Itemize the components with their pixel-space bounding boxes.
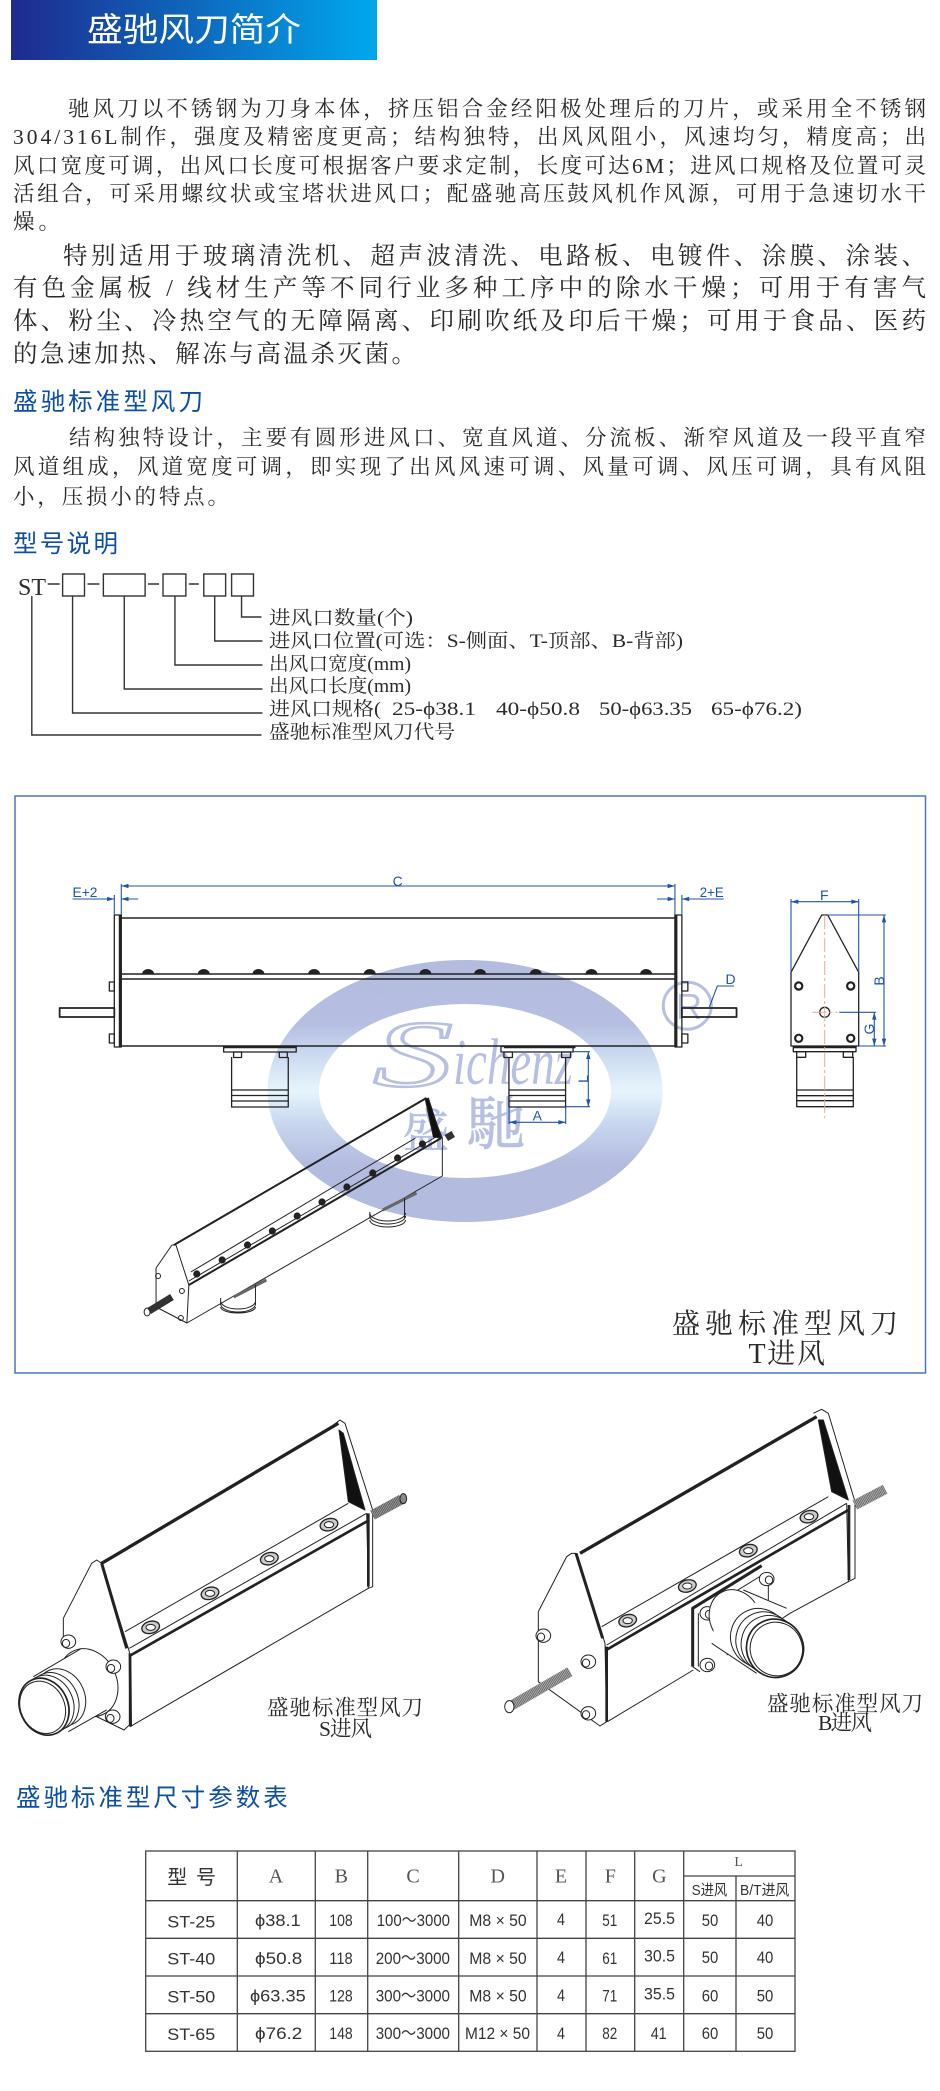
model code diagram: 65-ϕ76.2) <box>711 699 802 720</box>
table header: B/T进风 <box>740 1882 789 1899</box>
watermark logo: 盛 <box>403 1095 449 1161</box>
text block: applications paragraph: 特别适用于玻璃清洗机、超声波清洗、电路板、电镀件、涂膜、涂装、 <box>63 242 926 270</box>
table row ST-25: 40 <box>757 1911 773 1930</box>
dimension lines: front view: C <box>393 873 403 889</box>
isometric drawing: S inlet <box>10 1420 407 1743</box>
table header: A <box>269 1866 284 1888</box>
dimension lines: inlet and side view: D <box>725 971 736 987</box>
table row ST-50: ST-50 <box>167 1987 215 2006</box>
heading: standard air knife: 盛驰标准型风刀 <box>13 388 203 416</box>
model code diagram: 进风口规格( <box>269 698 381 720</box>
front view of air knife <box>60 915 737 1107</box>
text block: intro paragraph: 燥。 <box>13 210 60 234</box>
table row ST-65: 50 <box>757 2024 773 2043</box>
table row ST-50: 128 <box>329 1987 353 2006</box>
table row ST-40: ST-40 <box>167 1950 215 1969</box>
table row ST-25: 100～3000 <box>377 1911 450 1930</box>
table row ST-40: 50 <box>702 1948 718 1967</box>
table row ST-50: ϕ63.35 <box>250 1987 306 2006</box>
table header: 型 号 <box>167 1866 216 1889</box>
table row ST-65: ST-65 <box>167 2025 215 2044</box>
caption: B inlet: 盛驰标准型风刀 <box>767 1692 923 1716</box>
text block: intro paragraph: 活组合，可采用螺纹状或宝塔状进风口；配盛驰高压鼓风机作风源，可用于急速切水干 <box>13 182 926 207</box>
dimension lines: inlet and side view: A <box>533 1108 543 1124</box>
text block: intro paragraph: 风口宽度可调，出风口长度可根据客户要求定制，长度可达6M；进风口规格及位置可灵 <box>13 154 926 179</box>
caption: S inlet: 盛驰标准型风刀 <box>267 1696 423 1720</box>
table row ST-25: 108 <box>329 1911 353 1930</box>
table row ST-50: 50 <box>757 1987 773 2006</box>
header banner: 盛驰风刀简介 <box>87 11 301 48</box>
dimension lines: inlet and side view: L <box>575 1075 591 1083</box>
table row ST-50: 300～3000 <box>376 1987 450 2006</box>
table row ST-40 <box>167 1947 773 1969</box>
table row ST-50 <box>167 1984 773 2006</box>
text block: intro paragraph: 驰风刀以不锈钢为刀身本体，挤压铝合金经阳极处理后的刀片，或采用全不锈钢 <box>68 97 926 122</box>
table row ST-40: 4 <box>557 1948 565 1967</box>
table row ST-40: 200～3000 <box>376 1949 450 1968</box>
table row ST-25: 25.5 <box>644 1909 675 1928</box>
panel: T inlet drawing <box>15 796 926 1373</box>
table row ST-65 <box>167 2024 773 2044</box>
dimension lines: inlet and side view: G <box>861 1024 877 1034</box>
text block: applications paragraph: 体、粉尘、冷热空气的无障隔离、印刷吹纸及印后干燥；可用于食品、医药 <box>13 307 926 335</box>
dimension lines: inlet and side view <box>509 887 887 1124</box>
dimension lines: inlet and side view: B <box>871 976 887 986</box>
table row ST-40: 61 <box>602 1949 617 1968</box>
dimension lines: inlet and side view: F <box>820 887 829 903</box>
model code diagram: 出风口长度(mm) <box>269 675 411 697</box>
caption: T inlet: 盛驰标准型风刀 <box>672 1308 898 1340</box>
model code diagram: 盛驰标准型风刀代号 <box>269 721 455 743</box>
text block: applications paragraph: 的急速加热、解冻与高温杀灭菌。 <box>13 340 416 368</box>
table row ST-65: ϕ76.2 <box>255 2024 302 2043</box>
table row ST-65: 60 <box>702 2024 718 2043</box>
table header: B <box>335 1866 348 1888</box>
table row ST-50: 60 <box>702 1987 718 2006</box>
table row ST-65: 4 <box>557 2024 565 2043</box>
table row ST-25: ϕ38.1 <box>255 1911 301 1930</box>
table header <box>167 1855 789 1899</box>
table row ST-50: 4 <box>557 1986 565 2005</box>
table row ST-25: ST-25 <box>167 1912 215 1931</box>
isometric drawing: B inlet <box>505 1409 885 1726</box>
side view of air knife <box>791 915 859 1118</box>
heading: dimension table: 盛驰标准型尺寸参数表 <box>16 1784 288 1812</box>
model code diagram: 50-ϕ63.35 <box>599 699 692 720</box>
text block: applications paragraph <box>13 242 926 368</box>
watermark logo: S <box>373 1001 453 1107</box>
table header: D <box>490 1866 505 1888</box>
table row ST-65: M12 × 50 <box>465 2024 530 2043</box>
table row ST-40: 40 <box>757 1948 773 1967</box>
caption: S inlet: S进风 <box>319 1717 372 1741</box>
isometric air knife <box>144 1098 453 1323</box>
caption: B inlet <box>767 1692 923 1735</box>
table row ST-40: M8 × 50 <box>469 1949 527 1968</box>
table row ST-25 <box>167 1909 773 1931</box>
text block: structure paragraph: 小，压损小的特点。 <box>13 485 229 510</box>
dimension lines: front view: E+2 <box>73 884 98 900</box>
header banner <box>11 0 377 60</box>
table row ST-50: 71 <box>602 1987 617 2006</box>
table row ST-25: M8 × 50 <box>469 1911 527 1930</box>
text block: intro paragraph: 304/316L制作，强度及精密度更高；结构独特，出风风阻小，风速均匀，精度高；出 <box>13 125 926 150</box>
model code diagram: 进风口数量(个) <box>269 607 413 629</box>
text block: applications paragraph: 有色金属板 / 线材生产等不同行业多种工序中的除水干燥；可用于有害气 <box>13 274 926 302</box>
heading: model description: 型号说明 <box>13 530 118 558</box>
model code diagram: 40-ϕ50.8 <box>496 699 580 720</box>
table row ST-40: ϕ50.8 <box>255 1949 302 1968</box>
model code diagram <box>18 574 802 743</box>
watermark logo: ichenz <box>453 1026 573 1099</box>
dimension lines: front view: 2+E <box>700 884 724 900</box>
table row ST-40: 30.5 <box>644 1947 675 1966</box>
table row ST-50: 35.5 <box>644 1984 675 2003</box>
caption: B inlet: B进风 <box>818 1711 872 1735</box>
caption: T inlet: T进风 <box>748 1338 825 1370</box>
model code diagram: 进风口位置(可选：S-侧面、T-顶部、B-背部) <box>269 630 683 652</box>
text block: intro paragraph <box>13 97 926 234</box>
dimension lines: front view <box>73 873 724 915</box>
table header: F <box>605 1866 616 1888</box>
model code diagram: 出风口宽度(mm) <box>269 653 411 675</box>
table header: E <box>555 1866 567 1888</box>
table row ST-65: 148 <box>329 2024 353 2043</box>
table row ST-65: 300～3000 <box>376 2024 450 2043</box>
table header: L <box>734 1855 743 1870</box>
watermark logo: R <box>676 986 702 1027</box>
watermark logo: 馳 <box>466 1077 525 1161</box>
table header: C <box>406 1866 420 1888</box>
model code diagram: 25-ϕ38.1 <box>392 699 476 720</box>
text block: structure paragraph: 结构独特设计，主要有圆形进风口、宽直风道、分流板、渐窄风道及一段平直窄 <box>69 426 926 451</box>
table header: S进风 <box>692 1882 727 1899</box>
table row ST-40: 118 <box>329 1949 353 1968</box>
table: dimensions <box>146 1851 795 2051</box>
table row ST-50: M8 × 50 <box>469 1987 527 2006</box>
text block: structure paragraph <box>13 426 926 510</box>
watermark logo <box>268 960 711 1222</box>
model code diagram: ST <box>18 575 46 601</box>
table row ST-65: 82 <box>602 2024 617 2043</box>
caption: S inlet <box>267 1696 423 1741</box>
table row ST-25: 51 <box>602 1911 617 1930</box>
table row ST-65: 41 <box>651 2024 667 2043</box>
text block: structure paragraph: 风道组成，风道宽度可调，即实现了出风风速可调、风量可调、风压可调，具有风阻 <box>13 455 926 480</box>
table header: G <box>652 1866 667 1888</box>
table row ST-25: 4 <box>557 1910 565 1929</box>
caption: T inlet <box>672 1308 898 1370</box>
table row ST-25: 50 <box>702 1911 718 1930</box>
